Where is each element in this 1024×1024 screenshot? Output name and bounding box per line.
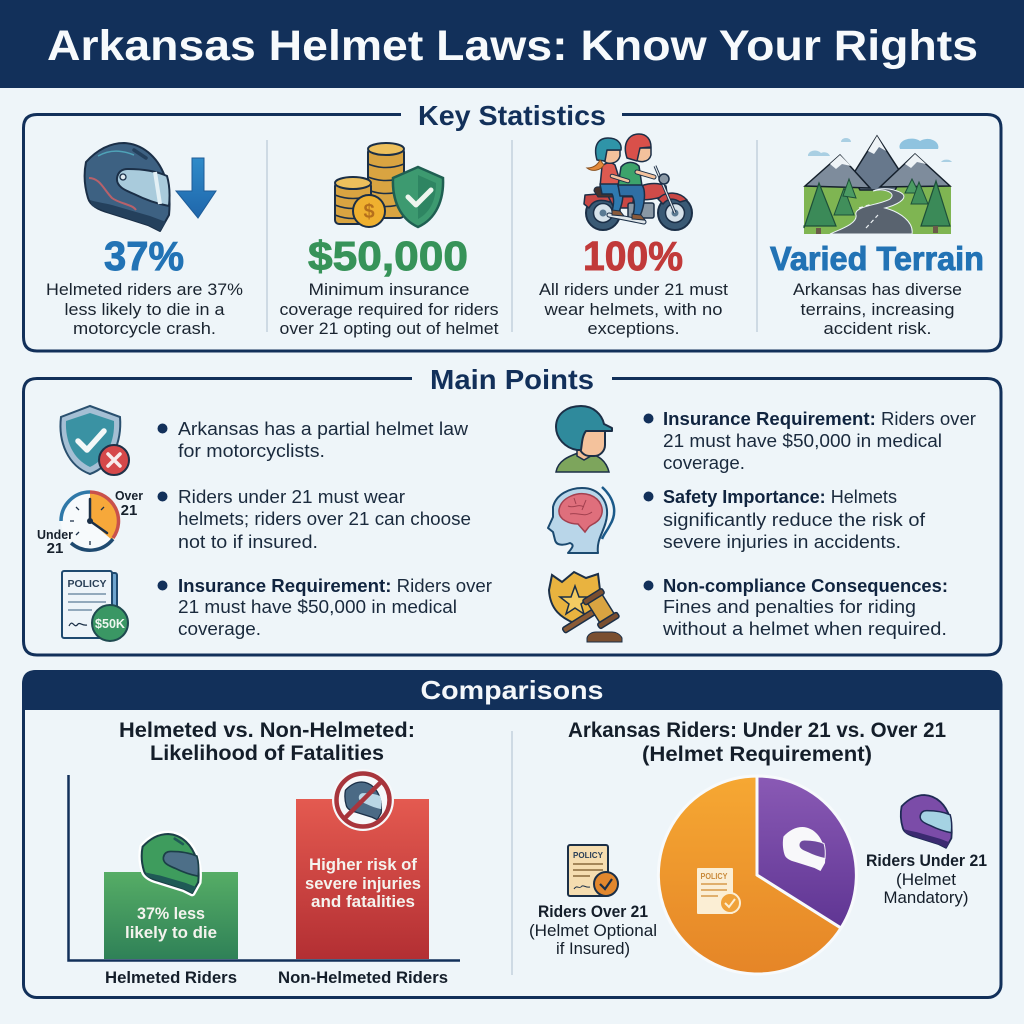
panel: key statistics [24,100,1001,351]
description: wear helmets, with no [543,300,722,319]
legend: riders over 21: Riders Over 21 [538,903,648,921]
slice: under 21 [757,776,856,928]
icon: helmet with down arrow [85,143,216,231]
pie chart: under 21 vs over 21 [658,776,856,974]
bar: non-helmeted riders: severe injuries [305,874,421,893]
icon: policy with check: POLICY [573,850,603,860]
bullet text: Insurance Requirement: Riders over [178,576,492,596]
heading bar: comparisons: Comparisons [420,675,604,705]
description: Arkansas has diverse [793,280,962,299]
icon: policy with 50K badge: POLICY [67,578,107,590]
bullet text: for motorcyclists. [178,441,325,461]
description: Helmeted riders are 37% [46,280,243,299]
icon: mountains and winding road [804,136,952,234]
description: Minimum insurance [308,280,470,299]
bar: helmeted riders: likely to die [125,923,217,942]
description [793,280,962,338]
bullet text: coverage. [663,453,745,473]
slice: over 21 [658,776,841,974]
axis label: helmeted: Helmeted Riders [105,969,237,987]
bar: helmeted riders [104,872,238,959]
heading bar: comparisons [22,670,1002,710]
value: 100%: 100% [583,233,683,279]
chart heading: fatalities: Likelihood of Fatalities [150,742,384,765]
bar: non-helmeted riders [296,799,429,959]
bullet text: Riders under 21 must wear [178,487,405,507]
icon: no helmet sign [332,769,394,831]
under 21 label: Under [37,528,73,542]
bullet text: not to if insured. [178,532,318,552]
stat: 100 percent [539,134,728,338]
value: 37%: 37% [104,233,184,279]
icon: policy in slice [697,868,740,914]
point: partial helmet law [60,406,469,475]
icon: green helmet [142,834,199,893]
legend: riders under 21: Riders Under 21 [866,852,987,870]
description [539,280,728,338]
description: All riders under 21 must [539,280,728,299]
bar: helmeted riders: 37% less [137,904,205,923]
icon: purple helmet [901,795,952,848]
icon: policy with 50K badge [62,571,128,641]
axis label: non-helmeted: Non-Helmeted Riders [278,969,448,987]
point: non-compliance [549,572,948,646]
over 21 label: Over [115,489,143,503]
legend: riders over 21: (Helmet Optional [529,922,657,940]
value: varied terrain: Varied Terrain [770,240,984,277]
legend: riders over 21 [529,845,657,958]
chart heading: fatalities [119,719,415,765]
value: $50,000: $50,000 [308,233,468,279]
bullet text [158,419,469,461]
bullet text: helmets; riders over 21 can choose [178,509,471,529]
bullet text: 21 must have $50,000 in medical [663,431,942,451]
bullet text [644,576,948,639]
icon: policy in slice: POLICY [700,872,728,881]
panel: main points [24,364,1001,655]
title banner: Arkansas Helmet Laws: Know Your Rights [47,22,978,70]
description: accident risk. [824,319,932,338]
title banner [0,0,1024,88]
bullet text: Insurance Requirement: Riders over [663,409,976,429]
icon: shield with x badge [60,406,129,475]
bar: non-helmeted riders: and fatalities [311,892,415,911]
chart heading: age groups: (Helmet Requirement) [642,743,872,766]
bullet text: Safety Importance: Helmets [663,487,897,507]
point: insurance requirement right [556,406,976,473]
icon: coins and shield: $ [363,201,375,223]
bar chart: likelihood of fatalities [68,769,460,987]
bullet text: Arkansas has a partial helmet law [178,419,469,439]
bullet text: severe injuries in accidents. [663,532,901,552]
chart heading: age groups [568,719,946,766]
description [46,280,243,338]
icon: rider head with helmet [556,406,612,472]
icon: badge and gavel [549,572,622,646]
bullet text: without a helmet when required. [662,619,947,639]
panel: comparisons [22,670,1002,998]
heading: main points: Main Points [430,364,594,395]
bullet text: Non-compliance Consequences: [663,576,948,596]
description: exceptions. [588,319,680,338]
stat: varied terrain [770,136,984,338]
description [280,280,499,338]
description: over 21 opting out of helmet [280,319,499,338]
legend: riders over 21: if Insured) [556,940,630,958]
bullet text: Fines and penalties for riding [663,597,916,617]
icon: policy with 50K badge: $50K [95,617,125,631]
point: age rule [37,487,471,557]
icon: clock over and under 21: 21 [47,540,63,557]
icon: head with brain [548,487,614,553]
stat: 50000 dollars [280,143,499,338]
chart heading: age groups: Arkansas Riders: Under 21 vs. Over 21 [568,719,946,742]
bar: non-helmeted riders: Higher risk of [309,855,417,874]
point: insurance requirement left [62,571,492,641]
heading: key statistics: Key Statistics [418,100,606,131]
point: safety importance [548,487,926,553]
icon: clock over and under 21: 21 [121,502,137,519]
bullet text: significantly reduce the risk of [663,510,926,530]
bullet text: 21 must have $50,000 in medical [178,597,457,617]
description: coverage required for riders [280,300,498,319]
bullet text: coverage. [178,619,261,639]
legend: riders under 21 [866,795,987,907]
legend: riders under 21: Mandatory) [884,889,968,907]
legend: riders under 21: (Helmet [896,871,956,889]
description: terrains, increasing [800,300,954,319]
bullet text [158,487,471,552]
description: motorcycle crash. [73,319,216,338]
icon: two riders on motorcycle [584,134,692,230]
bullet text [644,409,976,473]
icon: white helmet [783,827,825,871]
stat: 37 percent [46,143,243,338]
chart heading: fatalities: Helmeted vs. Non-Helmeted: [119,719,415,742]
bullet text [644,487,926,552]
icon: clock over and under 21 [37,489,143,557]
bullet text [158,576,492,639]
description: less likely to die in a [64,300,225,319]
icon: coins and shield [335,143,443,227]
